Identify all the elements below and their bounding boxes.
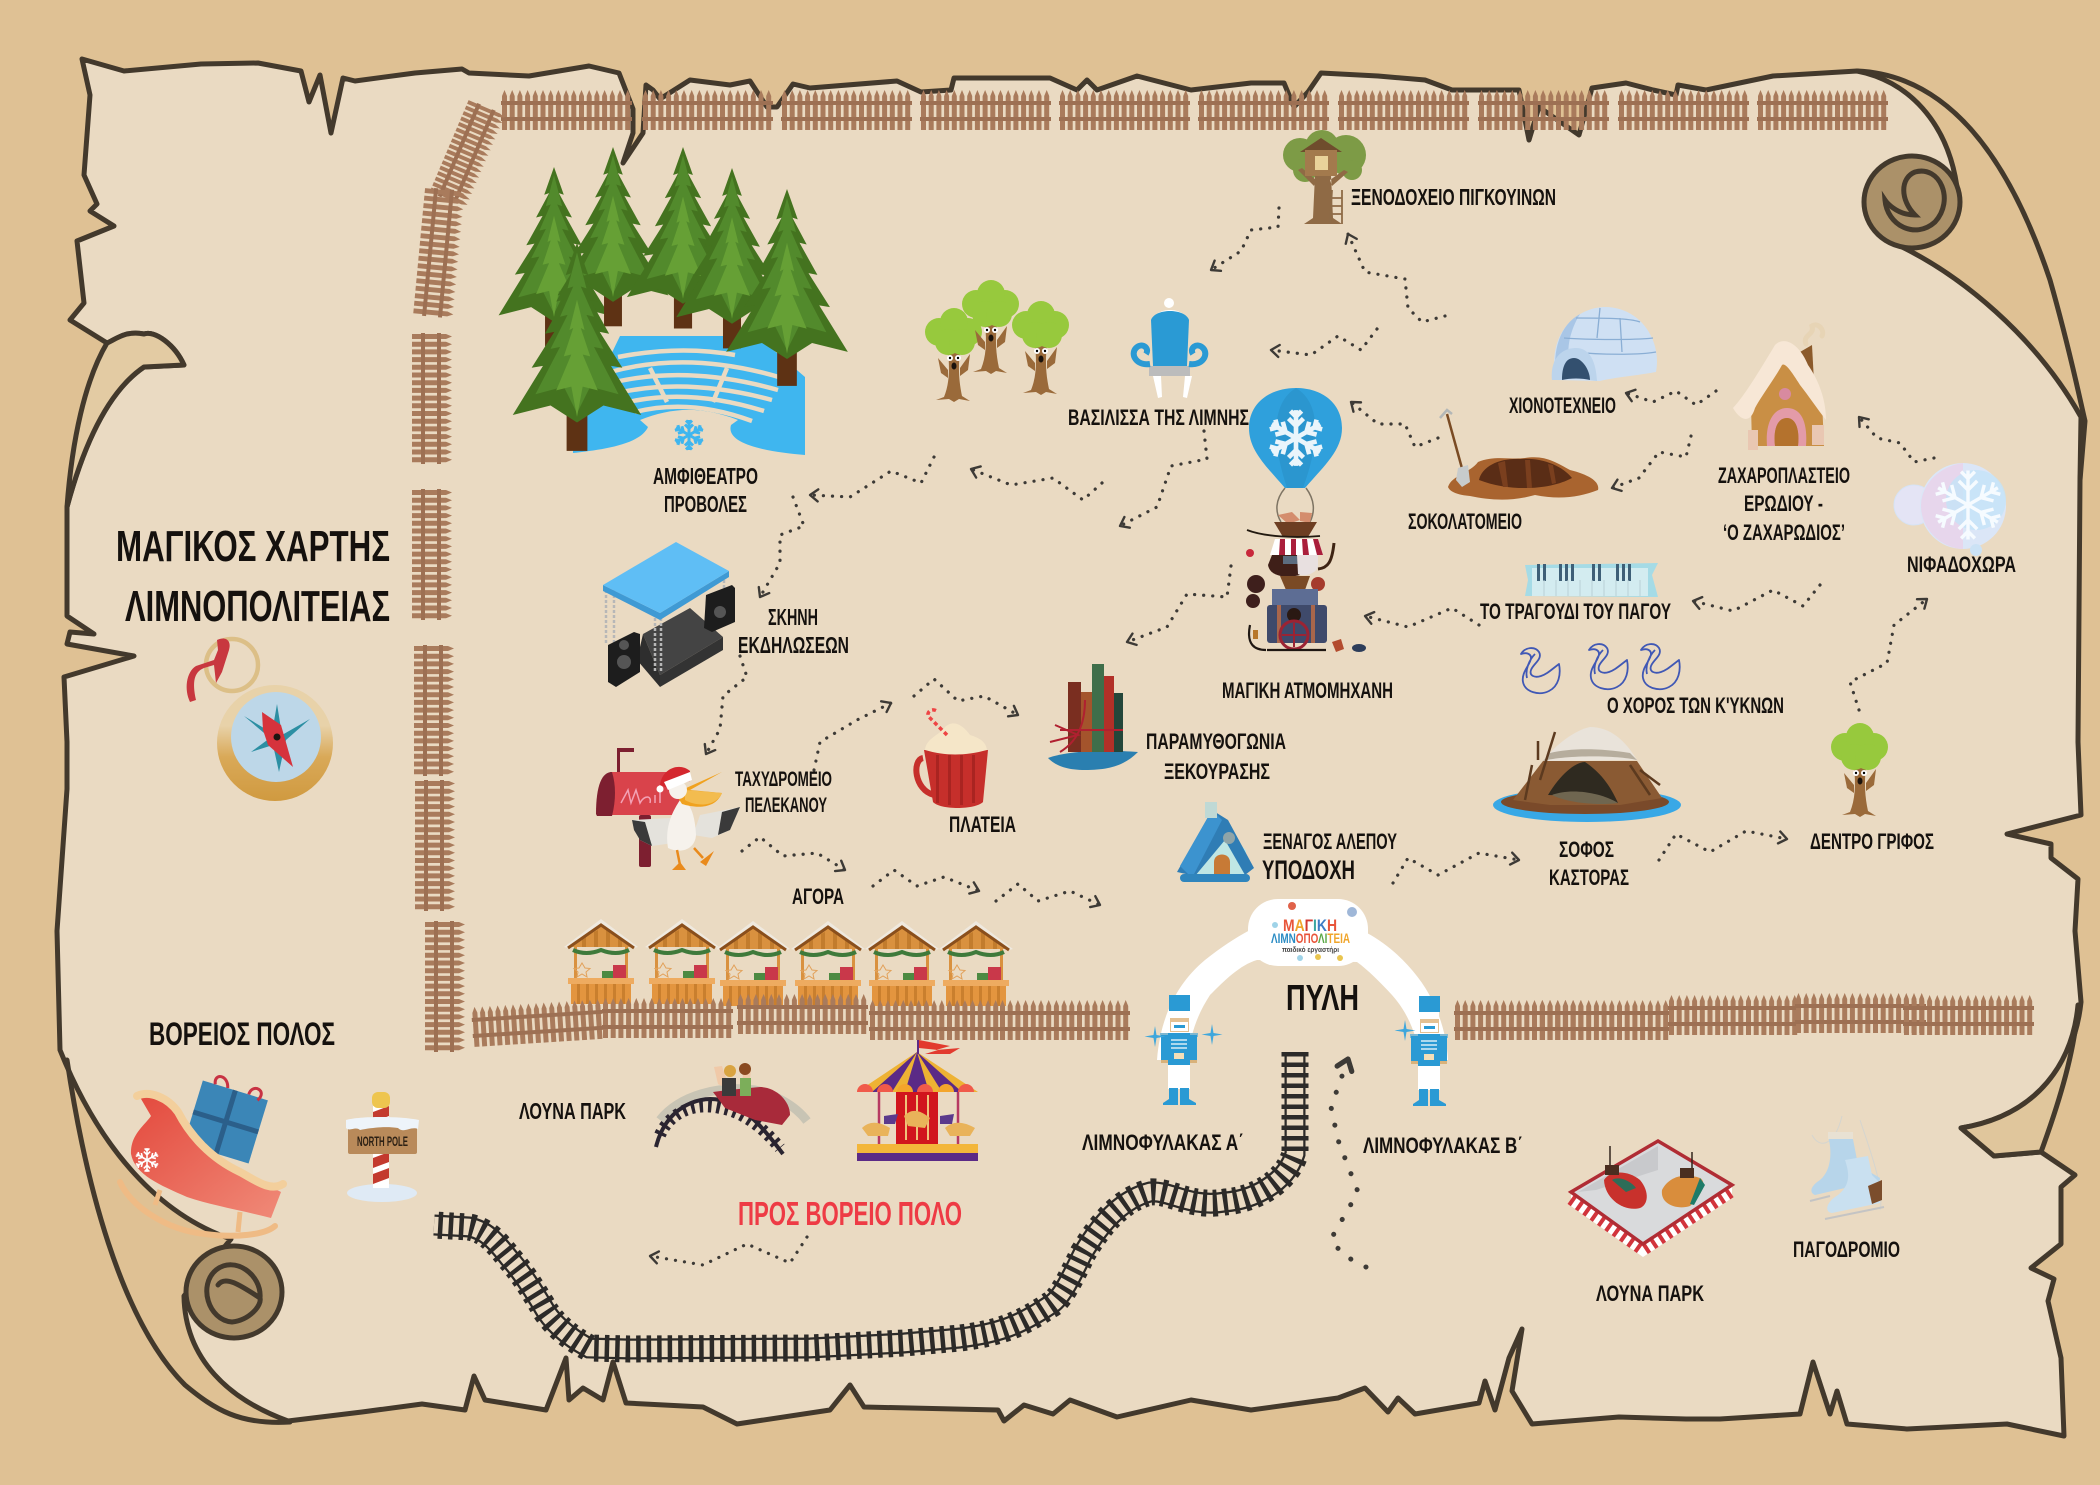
label: snow workshop: ΧΙΟΝΟΤΕΧΝΕΙΟ [1509, 393, 1616, 418]
label: dance of the swans: Ο ΧΟΡΟΣ ΤΩΝ Κ'ΥΚΝΩΝ [1607, 693, 1784, 718]
arrow: hotel to throne [1208, 208, 1279, 275]
icon: candy house [1733, 325, 1826, 450]
arrow: to north pole [649, 1237, 807, 1265]
label: pelican post office: ΤΑΧΥΔΡΟΜΕΙΟ [735, 768, 832, 791]
label: pastry shop: ΖΑΧΑΡΟΠΛΑΣΤΕΙΟ [1718, 463, 1850, 488]
icon: carousel [857, 1040, 978, 1161]
label: queen of the lake: ΒΑΣΙΛΙΣΣΑ ΤΗΣ ΛΙΜΝΗΣ [1068, 405, 1249, 430]
amphitheatre [573, 336, 805, 455]
icon: compass [187, 638, 333, 801]
icon: igloo [1552, 307, 1657, 381]
label: pelican post office [735, 768, 832, 817]
icon: magic steam engine [1246, 488, 1366, 652]
label: pastry shop: ‘Ο ΖΑΧΑΡΩΔΙΟΣ’ [1723, 520, 1845, 545]
arrow: to amphitheatre [810, 457, 934, 501]
icon: hot-air balloon with snowflake [1249, 388, 1342, 488]
label: penguin hotel: ΞΕΝΟΔΟΧΕΙΟ ΠΙΓΚΟΥΙΝΩΝ [1351, 184, 1556, 210]
label: amphitheatre: ΠΡΟΒΟΛΕΣ [664, 491, 747, 517]
icon: snow bubble [1894, 463, 2006, 556]
logo: παιδικό εργαστήρι [1282, 945, 1339, 954]
arrow: candy house to igloo [1624, 387, 1716, 405]
label: story corner [1146, 729, 1286, 784]
icon: chocolate pit and shovel [1440, 410, 1598, 500]
arrow: ice song to steam engine [1364, 608, 1479, 627]
label: magic steam engine: ΜΑΓΙΚΗ ΑΤΜΟΜΗΧΑΝΗ [1222, 678, 1393, 703]
arrow: entrance [1331, 1056, 1366, 1267]
arrow: to hotel [1343, 232, 1445, 322]
label: wise beaver: ΣΟΦΟΣ [1559, 837, 1614, 862]
icon: north pole sign [346, 1092, 419, 1202]
fence: bottom left [471, 994, 1130, 1047]
label: reception: ΥΠΟΔΟΧΗ [1262, 855, 1355, 885]
icon: ice piano [1525, 563, 1658, 597]
logo: ΜΑΓΙΚΗ [1283, 916, 1337, 935]
label: pastry shop: ΕΡΩΔΙΟΥ - [1744, 491, 1823, 516]
arrow: engine to books [1125, 566, 1231, 648]
label: amusement park right: ΛΟΥΝΑ ΠΑΡΚ [1596, 1281, 1704, 1306]
label: stage: ΕΚΔΗΛΩΣΕΩΝ [738, 632, 849, 658]
title [116, 522, 390, 631]
label: stage: ΣΚΗΝΗ [768, 604, 818, 630]
icon: throne [1134, 298, 1205, 398]
label: amphitheatre [653, 463, 758, 517]
label: lake guard B: ΛΙΜΝΟΦΥΛΑΚΑΣ Β΄ [1363, 1133, 1523, 1158]
arrow: to ice song [1692, 585, 1820, 611]
arrow: to stage [755, 497, 804, 600]
arrow: stage to post office [701, 656, 747, 757]
arrow: square to books [914, 679, 1021, 720]
icon: bumper cars [1571, 1141, 1732, 1257]
icon: roller coaster [656, 1063, 807, 1154]
arrow: snow bubble to candy house [1854, 413, 1934, 462]
icon: mailbox [596, 748, 680, 867]
arrow: to trees [969, 463, 1102, 500]
icon: ice skates [1810, 1116, 1884, 1219]
label: story corner: ΞΕΚΟΥΡΑΣΗΣ [1164, 759, 1270, 784]
icon: pelican [632, 767, 740, 870]
label: story corner: ΠΑΡΑΜΥΘΟΓΩΝΙΑ [1146, 729, 1286, 754]
fence: left vertical [412, 99, 506, 1052]
arrow: market 3 [996, 884, 1103, 910]
label: chocolate factory: ΣΟΚΟΛΑΤΟΜΕΙΟ [1408, 509, 1522, 534]
label: wise beaver [1549, 837, 1629, 890]
arrow: griffin tree to snow bubble [1850, 594, 1931, 710]
arrow: beaver to griffin tree [1659, 831, 1788, 860]
label: ice rink: ΠΑΓΟΔΡΟΜΙΟ [1793, 1237, 1900, 1262]
arrow: candy house to pit [1610, 436, 1691, 494]
icon: beaver lodge [1493, 727, 1681, 822]
scroll roll: bottom left [186, 1246, 282, 1338]
railway [434, 1052, 1295, 1349]
icon: swans [1521, 644, 1680, 693]
arrow: reception to beaver [1393, 853, 1520, 883]
icon: stack of books and cushion [1048, 664, 1138, 770]
scroll roll: top right [1864, 156, 1960, 248]
arrow: market 1 [742, 837, 848, 875]
arrow: to throne right [1270, 329, 1377, 357]
label: wise beaver: ΚΑΣΤΟΡΑΣ [1549, 865, 1629, 890]
label: market: ΑΓΟΡΑ [792, 884, 844, 909]
label: lake guard A: ΛΙΜΝΟΦΥΛΑΚΑΣ Α΄ [1082, 1130, 1244, 1155]
icon: hot chocolate cup [916, 710, 988, 808]
icon: lake guard B [1394, 996, 1448, 1106]
icon: trees with faces [925, 280, 1069, 402]
label: fox guide: ΞΕΝΑΓΟΣ ΑΛΕΠΟΥ [1263, 829, 1397, 854]
label: amusement park left: ΛΟΥΝΑ ΠΑΡΚ [519, 1098, 626, 1124]
arrow: pit to balloon [1347, 397, 1438, 447]
label: griffin tree: ΔΕΝΤΡΟ ΓΡΙΦΟΣ [1810, 829, 1934, 854]
icon: reception house [1177, 802, 1254, 882]
label: song of ice: ΤΟ ΤΡΑΓΟΥΔΙ ΤΟΥ ΠΑΓΟΥ [1480, 599, 1671, 624]
label: snow land: ΝΙΦΑΔΟΧΩΡΑ [1907, 552, 2016, 577]
arrow: market 2 [873, 870, 981, 897]
fence: top [501, 90, 1888, 130]
label: pelican post office: ΠΕΛΕΚΑΝΟΥ [745, 794, 827, 817]
title: ΜΑΓΙΚΟΣ ΧΑΡΤΗΣ [116, 522, 390, 571]
icon: stage [603, 542, 735, 687]
label: towards north pole: ΠΡΟΣ ΒΟΡΕΙΟ ΠΟΛΟ [738, 1195, 962, 1232]
icon: tree house [1283, 130, 1366, 224]
arrow: post office to square [814, 698, 894, 770]
icon: north pole sign: NORTH POLE [357, 1133, 408, 1149]
icon: sleigh [120, 1072, 283, 1236]
label: stage [738, 604, 849, 658]
logo [1271, 902, 1357, 961]
label: amphitheatre: ΑΜΦΙΘΕΑΤΡΟ [653, 463, 758, 489]
title: ΛΙΜΝΟΠΟΛΙΤΕΙΑΣ [125, 582, 390, 631]
label: pastry shop [1718, 463, 1850, 545]
arrow: throne label down [1117, 431, 1207, 531]
market stalls [564, 919, 1013, 1006]
label: north pole: ΒΟΡΕΙΟΣ ΠΟΛΟΣ [149, 1016, 335, 1052]
icon: griffin tree [1831, 723, 1888, 817]
forest of pine trees [499, 147, 848, 451]
fence: bottom right [1454, 993, 2034, 1040]
icon: lake guard A [1144, 995, 1222, 1105]
label: square: ΠΛΑΤΕΙΑ [949, 812, 1016, 837]
logo: ΛΙΜΝΟΠΟΛΙΤΕΙΑ [1271, 931, 1350, 946]
arch gate [1157, 899, 1448, 1060]
label: gate: ΠΥΛΗ [1286, 977, 1359, 1018]
